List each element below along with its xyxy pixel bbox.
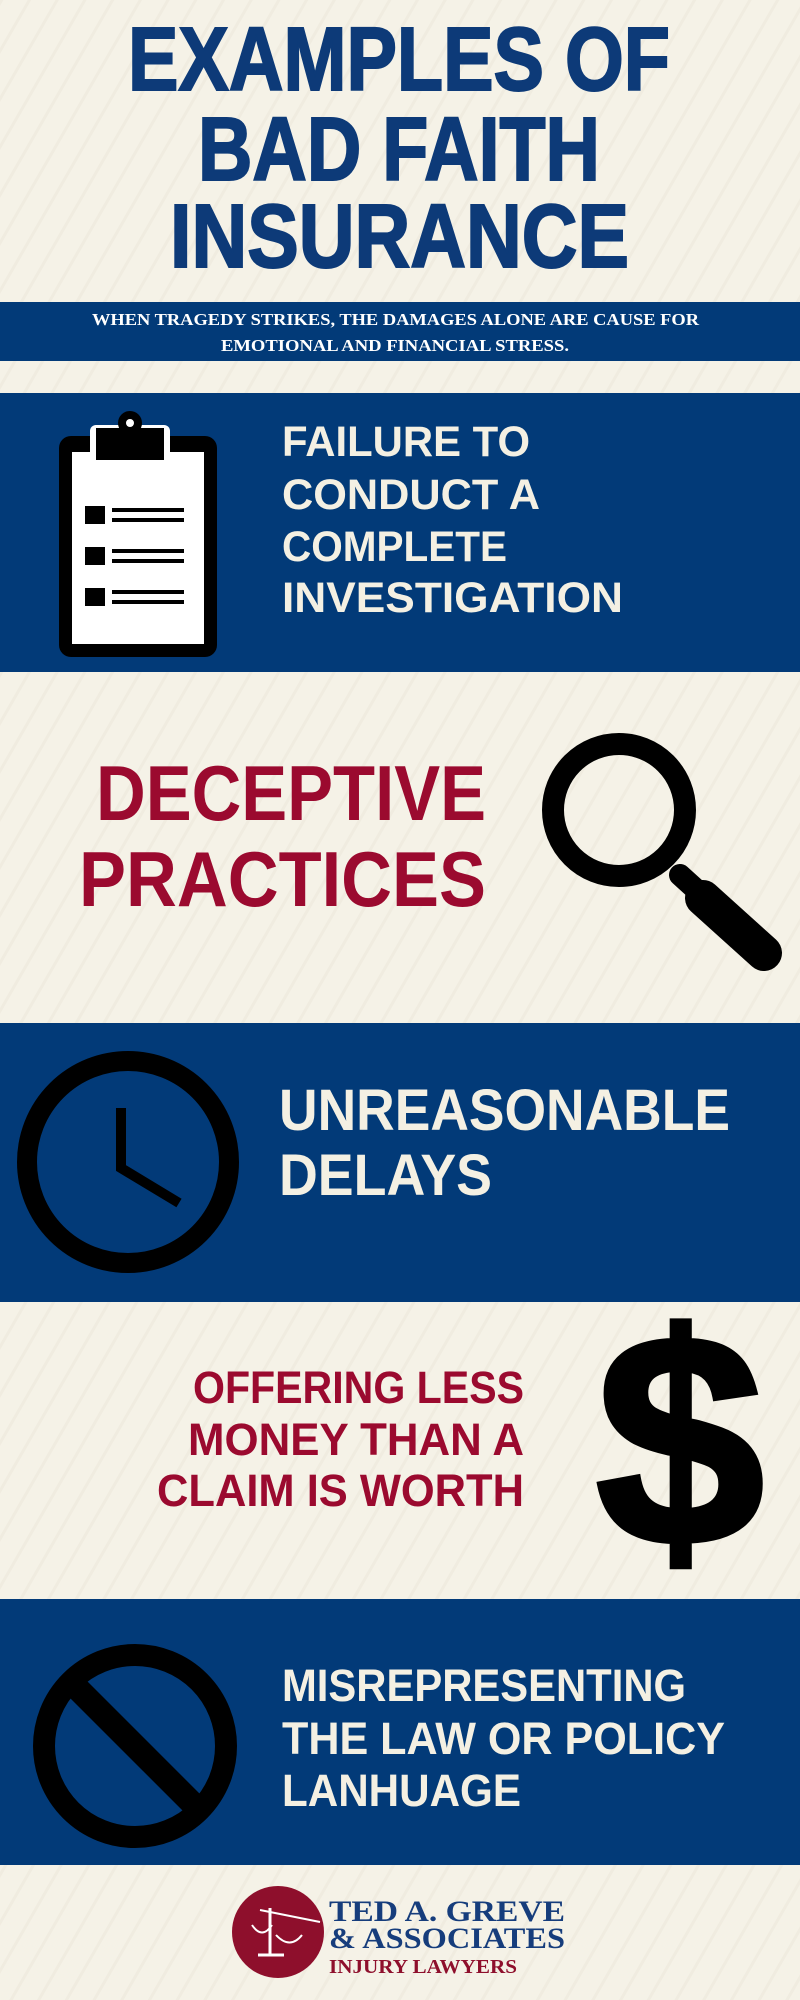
heading: failure to conduct a complete investigation: CONDUCT A xyxy=(282,471,540,519)
panel: failure to investigate xyxy=(0,393,800,672)
heading: misrepresenting the law xyxy=(282,1660,725,1816)
icon: prohibition sign xyxy=(44,1655,226,1837)
icon: magnifying glass xyxy=(553,744,766,953)
heading: deceptive practices xyxy=(79,749,486,923)
panel: deceptive practices xyxy=(79,744,766,953)
logo text xyxy=(329,1895,565,1978)
subtitle band: EMOTIONAL AND FINANCIAL STRESS. xyxy=(221,336,569,355)
title: INSURANCE xyxy=(170,187,629,287)
icon: clock xyxy=(27,1061,229,1263)
heading: misrepresenting the law: THE LAW OR POLICY xyxy=(282,1713,725,1764)
heading: misrepresenting the law: LANHUAGE xyxy=(282,1765,521,1816)
heading: offering less money: CLAIM IS WORTH xyxy=(157,1465,524,1516)
subtitle band: WHEN TRAGEDY STRIKES, THE DAMAGES ALONE ARE CAUSE FOR xyxy=(92,310,700,329)
icon: dollar sign: $ xyxy=(596,1272,764,1608)
heading: deceptive practices: PRACTICES xyxy=(79,835,486,923)
panel: unreasonable delays xyxy=(0,1023,800,1302)
icon: scales xyxy=(232,1886,324,1978)
heading: failure to conduct a complete investigation xyxy=(282,418,623,622)
heading: deceptive practices: DECEPTIVE xyxy=(96,749,486,837)
heading: misrepresenting the law: MISREPRESENTING xyxy=(282,1660,686,1711)
heading: offering less money xyxy=(157,1362,524,1516)
logo text: TED A. GREVE xyxy=(329,1895,565,1928)
title xyxy=(128,10,670,287)
logo text: & ASSOCIATES xyxy=(329,1922,565,1955)
title: EXAMPLES OF xyxy=(128,10,670,110)
logo text: INJURY LAWYERS xyxy=(329,1956,517,1978)
title: BAD FAITH xyxy=(198,100,600,200)
heading: failure to conduct a complete investigation: INVESTIGATION xyxy=(282,574,623,622)
panel: misrepresenting xyxy=(0,1599,800,1865)
panel: offering less money xyxy=(157,1272,764,1608)
heading: failure to conduct a complete investigation: COMPLETE xyxy=(282,523,507,571)
heading: unreasonable delays xyxy=(279,1078,730,1208)
icon: clipboard xyxy=(59,411,217,657)
heading: unreasonable delays: UNREASONABLE xyxy=(279,1078,730,1143)
heading: unreasonable delays: DELAYS xyxy=(279,1143,492,1208)
subtitle band xyxy=(0,302,800,361)
heading: offering less money: OFFERING LESS xyxy=(193,1362,524,1413)
heading: failure to conduct a complete investigation: FAILURE TO xyxy=(282,418,530,466)
heading: offering less money: MONEY THAN A xyxy=(188,1414,524,1465)
logo xyxy=(232,1886,565,1978)
